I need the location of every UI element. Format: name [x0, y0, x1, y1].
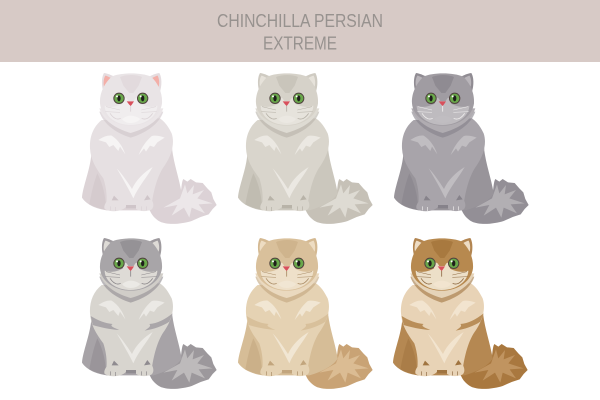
- title: CHINCHILLA PERSIAN: [217, 11, 383, 31]
- cat: golden cream: [238, 238, 373, 389]
- title: EXTREME: [263, 34, 337, 54]
- cat: dark grey: [394, 73, 529, 224]
- title banner: [0, 0, 600, 62]
- title: [217, 11, 383, 54]
- cat: grey and white: [82, 238, 217, 389]
- cat: cinnamon and cream: [393, 238, 528, 389]
- cat: white with pink ears: [82, 73, 217, 224]
- cat: cream grey: [238, 73, 373, 224]
